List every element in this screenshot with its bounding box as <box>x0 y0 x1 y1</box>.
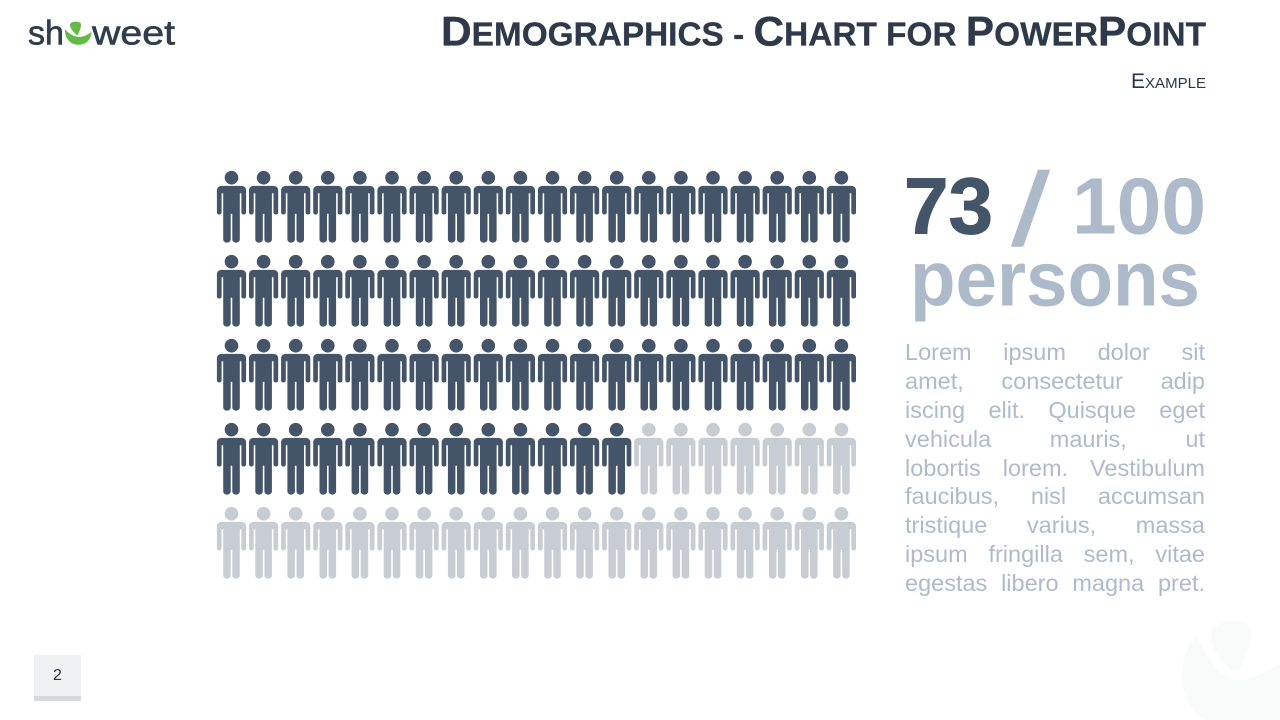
body text: amet, consectetur adip <box>905 368 1205 394</box>
pictogram chart: 73 of 100 persons <box>216 170 856 579</box>
row 1 <box>217 171 856 243</box>
subtitle: Example <box>1131 70 1206 93</box>
body text <box>905 339 1205 596</box>
logo: showeet: weet <box>91 14 176 52</box>
body text: tristique varius, massa <box>905 512 1205 538</box>
headline statistic: persons <box>910 235 1200 323</box>
body text: faucibus, nisl accumsan <box>905 483 1205 509</box>
page number <box>34 655 81 701</box>
body text: iscing elit. Quisque eget <box>905 397 1205 423</box>
body text: ipsum fringilla sem, vitae <box>905 541 1205 567</box>
headline statistic: 100 <box>1072 162 1206 250</box>
row 2 <box>217 255 856 327</box>
page number: 2 <box>53 667 62 684</box>
headline statistic <box>904 152 1206 323</box>
background watermark logo <box>1160 600 1280 720</box>
row 3 <box>217 339 856 411</box>
headline statistic: 73 <box>904 162 993 250</box>
row 4: 13 filled, 7 empty <box>217 423 856 495</box>
body text: lobortis lorem. Vestibulum <box>905 455 1205 481</box>
logo: showeet <box>28 14 176 52</box>
body text: egestas libero magna pret. <box>905 570 1205 596</box>
row 5 <box>217 507 856 579</box>
logo: showeet: sh <box>28 14 64 52</box>
body text: vehicula mauris, ut <box>905 426 1205 452</box>
headline statistic: / <box>1012 152 1049 267</box>
title: DEMOGRAPHICS - CHART FOR POWERPOINT <box>441 8 1206 55</box>
body text: Lorem ipsum dolor sit <box>905 339 1205 365</box>
